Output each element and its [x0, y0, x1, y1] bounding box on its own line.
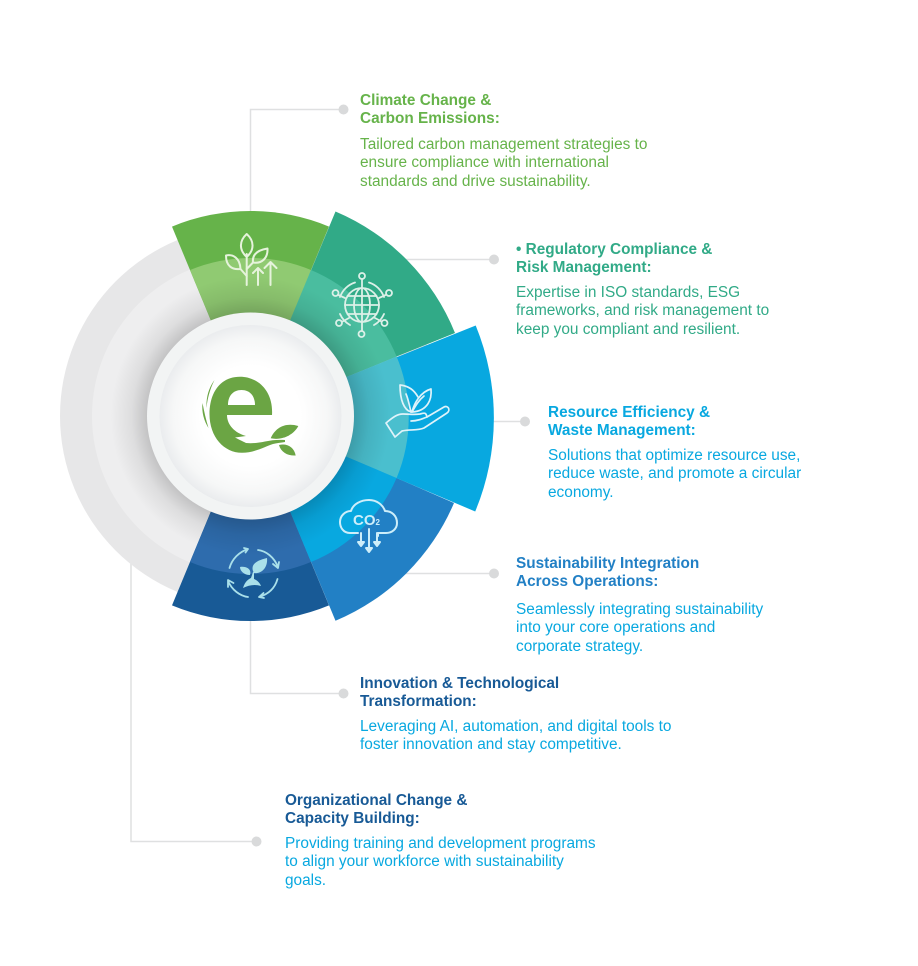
text: regulatory compliance: [516, 240, 769, 338]
text: climate change: standards and drive sustainability.: [360, 173, 591, 190]
text: regulatory compliance: • Regulatory Compliance &: [516, 240, 712, 258]
icon: recycling seedling: [228, 548, 279, 598]
text: regulatory compliance: frameworks, and risk management to: [516, 302, 769, 319]
text: innovation: Leveraging AI, automation, and digital tools to: [360, 718, 671, 735]
segment: sustainability: [250, 416, 454, 621]
text: organizational change: Capacity Building:: [285, 810, 420, 827]
text: regulatory compliance: keep you compliant and resilient.: [516, 321, 740, 338]
connector lines: [131, 110, 525, 842]
icon: plant with arrows: [226, 234, 276, 285]
text: regulatory compliance: Expertise in ISO standards, ESG: [516, 284, 740, 301]
text: regulatory compliance: Risk Management:: [516, 259, 652, 276]
centre disc: [147, 312, 354, 520]
text: sustainability integration: Seamlessly integrating sustainability: [516, 601, 763, 618]
text: organizational change: Providing training and development programs: [285, 835, 596, 852]
text: organizational change: goals.: [285, 872, 326, 889]
text: resource efficiency: Solutions that optimize resource use,: [548, 447, 800, 464]
text: organizational change: [285, 792, 596, 889]
text: innovation: foster innovation and stay competitive.: [360, 736, 622, 753]
text: climate change: ensure compliance with international: [360, 154, 609, 171]
text: innovation: Innovation & Technological: [360, 674, 559, 692]
text: resource efficiency: reduce waste, and promote a circular: [548, 465, 801, 482]
centre shadow: [110, 276, 390, 556]
text: sustainability integration: corporate strategy.: [516, 638, 643, 655]
text: resource efficiency: [548, 404, 801, 501]
segment: resource: [250, 326, 494, 512]
grey background discs: [60, 226, 441, 606]
icon: globe network: [332, 273, 392, 337]
segment: climate: [172, 211, 329, 416]
text: sustainability integration: into your core operations and: [516, 619, 715, 636]
icon: hand with seedling: [386, 385, 449, 437]
text: resource efficiency: Resource Efficiency &: [548, 404, 710, 420]
text: sustainability integration: [516, 554, 764, 655]
segment: innovation: [172, 416, 329, 621]
text: sustainability integration: Across Operations:: [516, 573, 658, 590]
segment: regulatory: [250, 212, 455, 416]
text: sustainability integration: Sustainability Integration: [516, 554, 699, 572]
text: organizational change: Organizational Change &: [285, 792, 467, 808]
text: innovation: Transformation:: [360, 693, 477, 710]
text: resource efficiency: economy.: [548, 484, 614, 501]
logo: e with leaves: [202, 377, 298, 456]
text: climate change: [360, 92, 647, 190]
text: climate change: Carbon Emissions:: [360, 110, 500, 127]
connector dots: [252, 104, 530, 846]
text: organizational change: to align your workforce with sustainability: [285, 853, 564, 870]
icon: CO2 cloud: [340, 500, 397, 552]
text: innovation: [360, 674, 671, 753]
text: resource efficiency: Waste Management:: [548, 422, 696, 439]
text: climate change: Climate Change &: [360, 92, 491, 108]
text: climate change: Tailored carbon management strategies to: [360, 136, 647, 153]
icon label: CO2: CO2: [353, 512, 380, 529]
